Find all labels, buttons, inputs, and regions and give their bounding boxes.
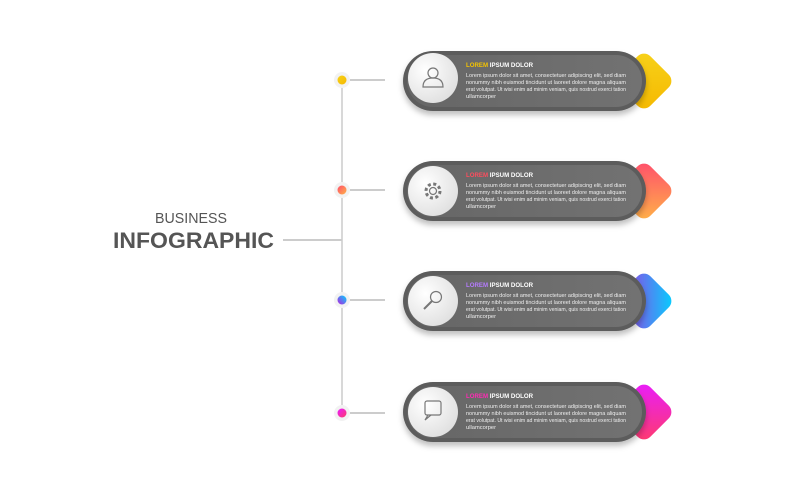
card 4: ullamcorper bbox=[466, 425, 496, 431]
arrow tab 3 bbox=[613, 270, 675, 332]
timeline vertical line bbox=[341, 75, 343, 420]
card 4: LOREM IPSUM DOLOR bbox=[466, 393, 533, 400]
card 4: nonummy nibh euismod tincidunt ut laoreet dolore magna aliquam bbox=[466, 411, 626, 417]
card 3: LOREM IPSUM DOLOR bbox=[466, 282, 533, 289]
timeline dots and branches bbox=[334, 72, 385, 421]
card 2: Lorem ipsum dolor sit amet, consectetuer adipiscing elit, sed diam bbox=[466, 183, 626, 189]
card 2: nonummy nibh euismod tincidunt ut laoreet dolore magna aliquam bbox=[466, 190, 626, 196]
card 1: Lorem ipsum dolor sit amet, consectetuer adipiscing elit, sed diam bbox=[466, 73, 626, 79]
arrow tab 1 bbox=[613, 50, 675, 112]
card 4: Lorem ipsum dolor sit amet, consectetuer adipiscing elit, sed diam bbox=[466, 404, 626, 410]
icon: user bbox=[423, 68, 443, 87]
icon: chat bubble bbox=[425, 401, 441, 420]
icon: gear bbox=[426, 184, 440, 198]
card 4 bbox=[403, 381, 675, 443]
connector: title line bbox=[283, 239, 342, 241]
title bbox=[113, 211, 274, 253]
card 2: erat volutpat. Ut wisi enim ad minim veniam, quis nostrud exerci tation bbox=[466, 197, 626, 203]
card 2: ullamcorper bbox=[466, 204, 496, 210]
card 3: ullamcorper bbox=[466, 314, 496, 320]
card 3: erat volutpat. Ut wisi enim ad minim veniam, quis nostrud exerci tation bbox=[466, 307, 626, 313]
card 3: nonummy nibh euismod tincidunt ut laoreet dolore magna aliquam bbox=[466, 300, 626, 306]
card 3 bbox=[403, 270, 675, 332]
arrow tab 2 bbox=[613, 160, 675, 222]
card 1: LOREM IPSUM DOLOR bbox=[466, 62, 533, 69]
card 1: erat volutpat. Ut wisi enim ad minim veniam, quis nostrud exerci tation bbox=[466, 87, 626, 93]
arrow tab 4 bbox=[613, 381, 675, 443]
card 2 bbox=[403, 160, 675, 222]
title: INFOGRAPHIC bbox=[113, 228, 274, 253]
card 4: erat volutpat. Ut wisi enim ad minim veniam, quis nostrud exerci tation bbox=[466, 418, 626, 424]
icon: magnifier bbox=[424, 292, 442, 309]
card 1 bbox=[403, 50, 675, 112]
card 3: Lorem ipsum dolor sit amet, consectetuer adipiscing elit, sed diam bbox=[466, 293, 626, 299]
card 1: ullamcorper bbox=[466, 94, 496, 100]
title: BUSINESS bbox=[155, 211, 227, 227]
card 2: LOREM IPSUM DOLOR bbox=[466, 172, 533, 179]
card 1: nonummy nibh euismod tincidunt ut laoreet dolore magna aliquam bbox=[466, 80, 626, 86]
